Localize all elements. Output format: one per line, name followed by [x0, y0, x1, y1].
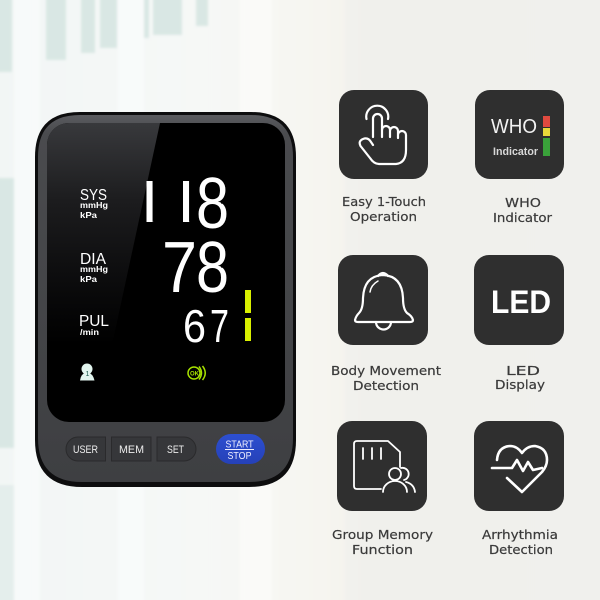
feature: LED display	[474, 255, 564, 392]
pulse value 67: 7	[210, 300, 229, 352]
feature: body movement detection	[331, 255, 441, 393]
systolic value 118: 1	[167, 164, 202, 244]
caption: Group Memory	[332, 528, 433, 542]
feature: WHO indicator	[475, 90, 564, 225]
icon tile: hand tap	[339, 90, 428, 179]
diastolic reading label	[80, 251, 108, 284]
caption: Function	[352, 543, 413, 557]
caption: WHO	[505, 196, 541, 210]
caption	[495, 364, 545, 392]
blood pressure monitor	[35, 112, 296, 487]
caption: Operation	[350, 210, 417, 224]
pulse value 67	[183, 300, 229, 352]
diastolic value 78: 7	[162, 228, 197, 308]
caption	[342, 195, 426, 224]
START / STOP button: STOP	[228, 450, 252, 462]
systolic reading label: mmHg	[80, 200, 108, 210]
icon: OK cuff indicator: OK	[190, 372, 200, 378]
caption: LED	[506, 364, 540, 378]
icon tile: LED: LED	[491, 284, 551, 320]
SET button	[157, 437, 196, 461]
diastolic reading label: mmHg	[80, 264, 108, 274]
caption: Detection	[489, 543, 553, 557]
systolic value 118	[146, 177, 226, 228]
icon: user 1: 1	[86, 371, 90, 378]
caption	[493, 196, 552, 225]
systolic reading label	[80, 187, 108, 220]
icon tile: WHO colour scale: WHO	[491, 116, 537, 138]
caption: Display	[495, 378, 545, 392]
caption	[332, 528, 433, 557]
USER button	[66, 437, 106, 461]
caption	[331, 364, 441, 393]
SET button: SET	[167, 444, 184, 456]
diastolic value 78: 8	[196, 228, 229, 308]
systolic value 118: 1	[130, 164, 166, 244]
pulse label: PUL	[79, 313, 109, 330]
icon tile: memory card with users	[337, 421, 427, 511]
START / STOP button	[216, 434, 265, 464]
icon tile: WHO colour scale: Indicator	[493, 146, 539, 158]
icon: OK cuff indicator	[188, 366, 205, 380]
icon tile: WHO colour scale	[475, 90, 564, 179]
device shell	[35, 112, 296, 487]
MEM button	[112, 437, 151, 461]
diastolic reading label: kPa	[80, 274, 97, 284]
icon: user 1	[80, 364, 94, 380]
systolic reading label: SYS	[80, 187, 107, 204]
caption: Easy 1-Touch	[342, 195, 426, 209]
START / STOP button: START	[226, 438, 254, 450]
feature: easy one-touch operation	[339, 90, 428, 224]
USER button: USER	[73, 444, 98, 456]
feature: arrhythmia detection	[474, 421, 564, 557]
device body	[38, 115, 293, 482]
display screen	[47, 123, 285, 422]
diastolic reading label: DIA	[80, 251, 107, 268]
MEM button: MEM	[119, 444, 144, 456]
pressure level bars	[245, 290, 251, 341]
systolic value 118: 8	[196, 164, 229, 244]
pulse label: /min	[80, 327, 99, 337]
systolic reading label: kPa	[80, 210, 97, 220]
caption: Arrhythmia	[482, 528, 558, 542]
icon tile: heart with pulse	[474, 421, 564, 511]
caption: Body Movement	[331, 364, 441, 378]
caption: Detection	[353, 379, 419, 393]
feature: group memory function	[332, 421, 433, 557]
icon tile: bell	[338, 255, 428, 345]
caption: Indicator	[493, 211, 552, 225]
diastolic value 78	[162, 228, 229, 308]
pulse value 67: 6	[183, 300, 206, 352]
caption	[482, 528, 558, 557]
